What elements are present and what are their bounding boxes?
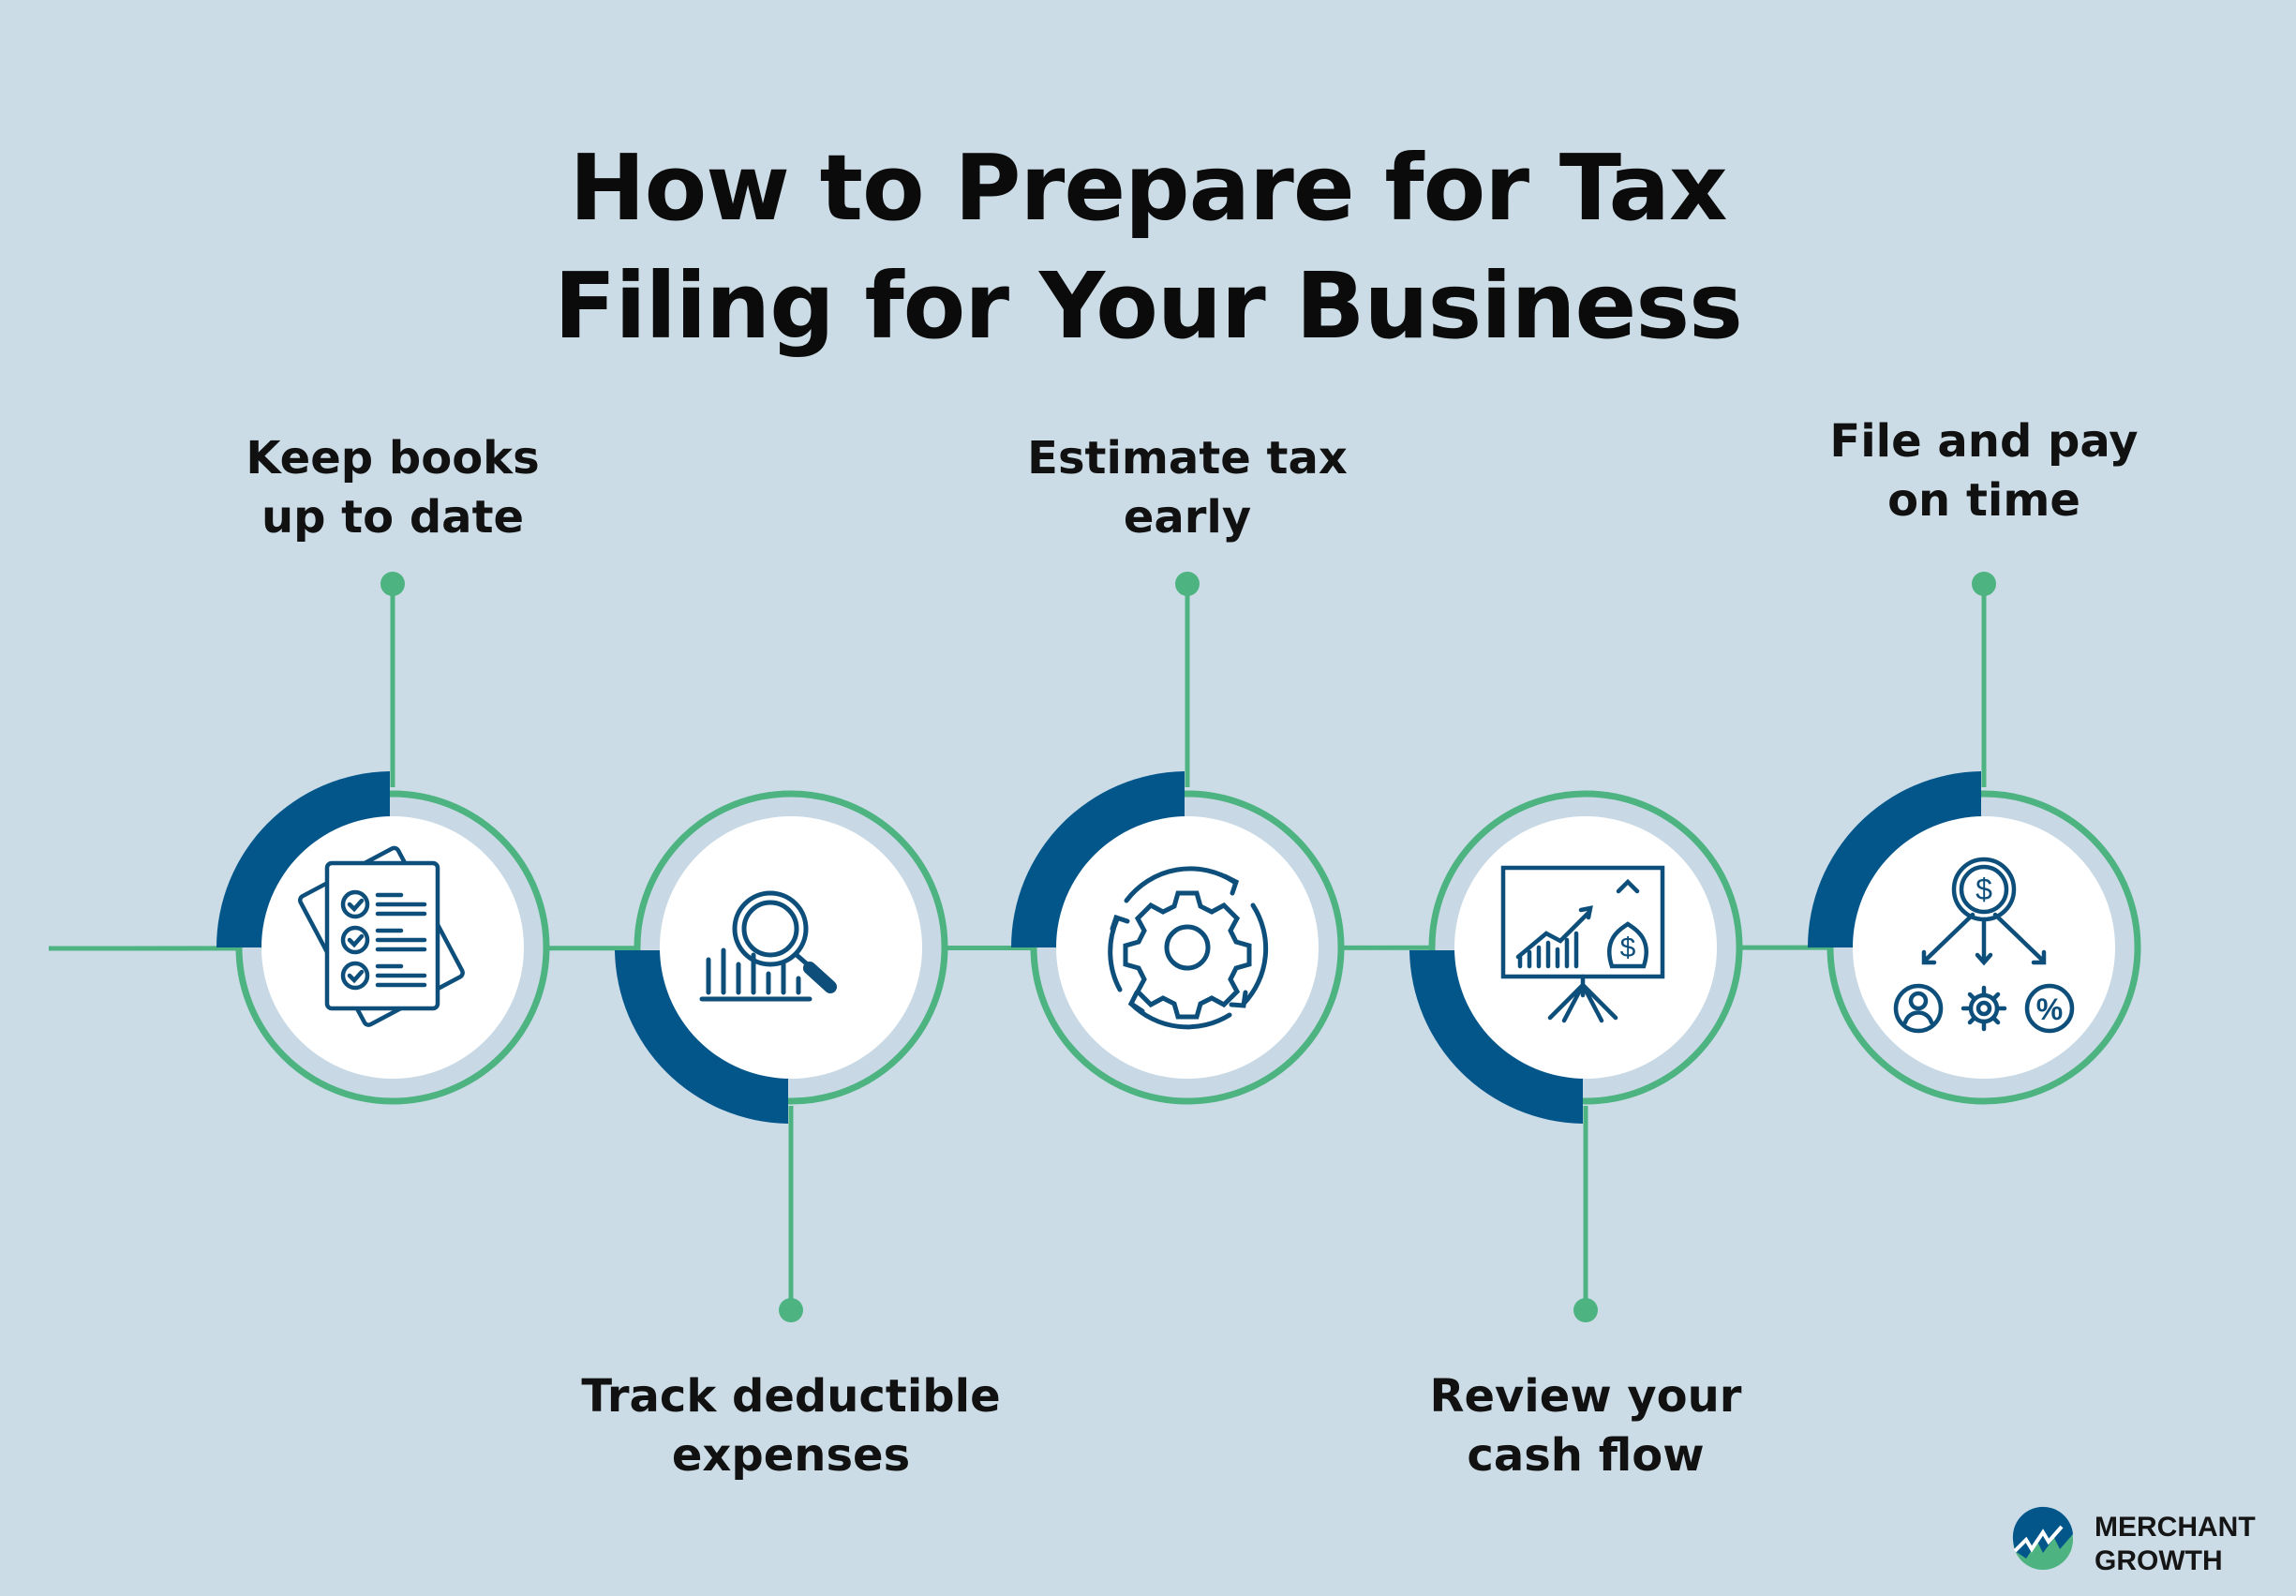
logo: MERCHANT — [2095, 1512, 2256, 1543]
icon: money distribution — [1896, 859, 2072, 1031]
icon: presentation board — [1503, 868, 1662, 1021]
label: review cash flow — [1430, 1370, 1741, 1482]
label: file and pay — [1829, 415, 2139, 527]
icon: checklist — [298, 846, 464, 1026]
icon: money distribution: % — [2036, 992, 2063, 1026]
title: How to Prepare for Tax — [569, 135, 1727, 241]
title — [554, 135, 1742, 359]
label: keep books: Keep books — [246, 432, 540, 485]
icon: presentation board: $ — [1620, 932, 1636, 963]
label: track expenses — [581, 1370, 1001, 1482]
label: estimate tax — [1027, 432, 1348, 544]
circle 2 — [615, 794, 945, 1124]
label: track expenses: expenses — [672, 1429, 910, 1482]
label: keep books — [246, 432, 540, 544]
title: Filing for Your Business — [554, 253, 1742, 359]
label: estimate tax: early — [1124, 491, 1251, 544]
label: keep books: up to date — [261, 491, 524, 544]
label: file and pay: File and pay — [1829, 415, 2139, 468]
logo: GROWTH — [2095, 1545, 2223, 1576]
label: review cash flow: Review your — [1430, 1370, 1741, 1423]
circle 5 — [1808, 771, 2138, 1101]
circle 1 — [216, 771, 546, 1101]
icon: gear cycle — [1111, 869, 1266, 1027]
connectors — [380, 572, 1996, 1322]
logo — [2013, 1507, 2256, 1576]
circle 4 — [1409, 794, 1739, 1124]
label: track expenses: Track deductible — [581, 1370, 1001, 1423]
label: estimate tax: Estimate tax — [1027, 432, 1348, 485]
icon: magnifier chart — [702, 893, 834, 999]
horizontal timeline line — [49, 947, 1984, 948]
label: review cash flow: cash flow — [1467, 1429, 1705, 1482]
label: file and pay: on time — [1887, 474, 2080, 527]
circle 3 — [1011, 771, 1341, 1101]
icon: money distribution: $ — [1975, 873, 1992, 906]
